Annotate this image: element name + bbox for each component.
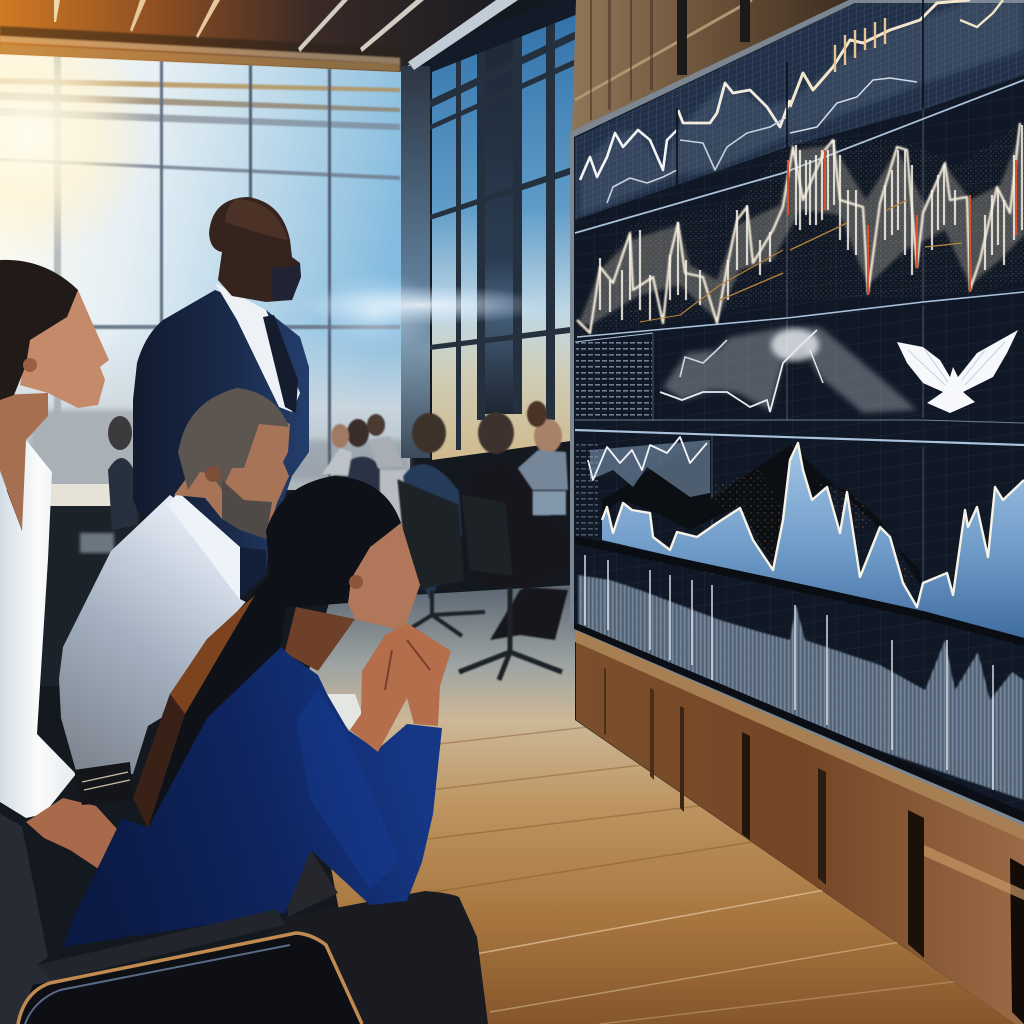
row 3 cloud chart <box>660 327 917 413</box>
ceiling <box>0 0 520 72</box>
sun glare <box>0 10 153 260</box>
background: conference group <box>322 401 568 640</box>
person: woman in front <box>63 476 488 1024</box>
ponytail highlight <box>170 595 255 714</box>
row 5 volume bars <box>574 555 1024 825</box>
hand <box>26 798 118 870</box>
screen grid <box>560 0 1024 830</box>
rug detail and white cushion <box>326 694 396 810</box>
person: woman on left <box>0 260 118 870</box>
trousers <box>200 891 488 1024</box>
hair <box>133 476 401 828</box>
face <box>348 523 420 631</box>
row 4 blue area chart <box>575 437 1024 642</box>
background: hazy city and desk behind left group <box>30 410 140 686</box>
market screen <box>560 0 1024 830</box>
person: seated man <box>59 388 290 805</box>
head <box>209 197 301 302</box>
blouse <box>0 440 76 818</box>
row 2 candlestick chart <box>577 120 1024 335</box>
floor <box>300 585 1015 1024</box>
person: standing man <box>133 197 309 595</box>
shirt and tie <box>215 283 300 413</box>
lower wood wall <box>575 630 1024 1024</box>
hair <box>0 260 78 400</box>
upper wood wall <box>572 0 860 132</box>
panel dividers <box>575 0 1024 612</box>
floor boards <box>415 712 1010 1024</box>
neck <box>285 607 355 671</box>
sleeve highlight <box>296 690 400 890</box>
blue top <box>63 647 442 947</box>
row 1 mini charts <box>575 0 1024 220</box>
chair: front seat <box>0 814 362 1024</box>
neck and chest <box>0 393 48 531</box>
face <box>20 290 109 408</box>
lens flare <box>290 270 550 354</box>
hands <box>350 623 451 752</box>
icon: white dove <box>897 330 1018 413</box>
window mullions <box>0 50 400 490</box>
jacket behind <box>240 547 266 598</box>
head <box>174 400 290 539</box>
background: office chairs <box>398 480 562 680</box>
column and right window <box>401 0 578 460</box>
row 3 data table <box>576 342 652 418</box>
window wall: left <box>0 0 410 490</box>
